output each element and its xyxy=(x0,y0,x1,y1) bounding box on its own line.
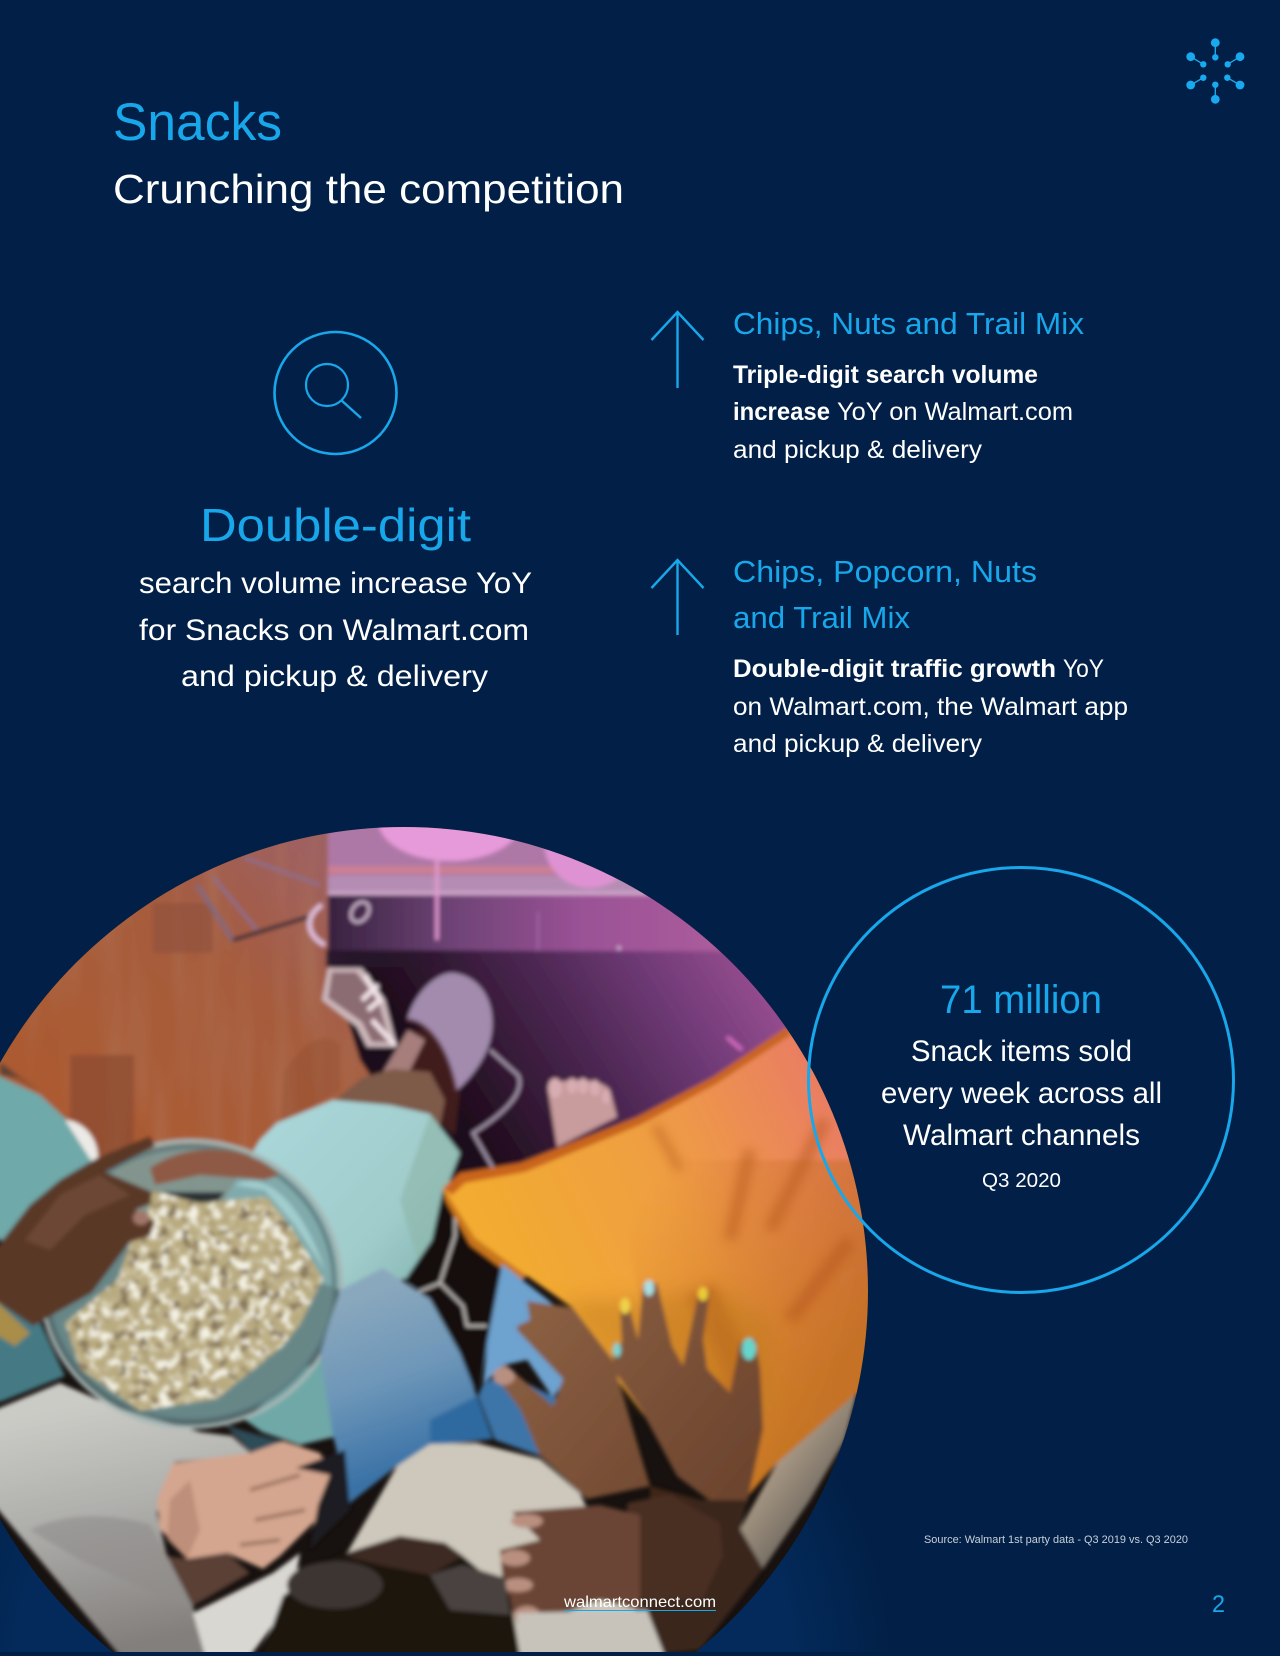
TV stand xyxy=(325,892,724,955)
icon: magnifier in circle xyxy=(274,332,396,454)
text block: double-digit traffic: Double-digit traffic growth xyxy=(733,655,1056,683)
wire xyxy=(473,1050,520,1168)
subtitle: Crunching the competition xyxy=(113,166,624,212)
tee left xyxy=(0,1383,252,1656)
shirt xyxy=(0,1072,95,1240)
painted nails xyxy=(613,1280,756,1360)
heading: Chips, Popcorn, Nuts and Trail Mix xyxy=(733,554,1037,635)
watch xyxy=(0,1300,30,1346)
link: walmartconnect.com: walmartconnect.com xyxy=(563,1594,716,1611)
icon: network logo xyxy=(1186,38,1244,104)
arrow: up xyxy=(652,560,704,635)
baby foot xyxy=(548,1080,617,1147)
text block: search volume description: for Snacks on Walmart.com xyxy=(139,614,529,647)
knee xyxy=(333,1069,445,1125)
baby hand left xyxy=(157,1441,332,1569)
popcorn bowl xyxy=(41,1141,341,1427)
beige hair xyxy=(740,1393,857,1569)
text block: triple-digit: increase xyxy=(733,398,830,426)
source note: Source: Walmart 1st party data - Q3 2019 vs. Q3 2020 xyxy=(924,1534,1188,1546)
panel: chips, nuts and trail mix xyxy=(652,306,1085,464)
callout: 71 million ring xyxy=(808,868,1234,1292)
text block: triple-digit: Triple-digit search volume xyxy=(733,361,1038,389)
ring xyxy=(808,868,1234,1292)
panel: chips, popcorn, nuts and trail mix xyxy=(652,554,1128,758)
lower shorts xyxy=(245,1360,334,1445)
shorts xyxy=(200,1100,460,1290)
jeans xyxy=(320,1268,493,1503)
pillow xyxy=(443,1027,880,1505)
leg and slipper xyxy=(383,1030,460,1135)
text block: search volume description: and pickup & delivery xyxy=(181,660,488,693)
hair and glasses xyxy=(262,1536,520,1656)
dark floor xyxy=(331,948,791,1182)
text block: triple-digit xyxy=(733,361,1073,464)
popcorn xyxy=(65,1190,323,1411)
heading: Chips, Popcorn, Nuts and Trail Mix: and Trail Mix xyxy=(733,600,910,635)
text block: search volume description xyxy=(139,567,532,693)
tee centre xyxy=(347,1443,660,1656)
stat: 71 million: 71 million xyxy=(940,978,1102,1022)
text block: search volume description: search volume increase YoY xyxy=(139,567,532,600)
heading: Double-digit: Double-digit xyxy=(200,499,471,551)
baby arm right xyxy=(627,1494,723,1600)
text block: snack items: Snack items sold xyxy=(911,1035,1132,1068)
rug xyxy=(328,815,800,897)
text block: triple-digit: and pickup & delivery xyxy=(733,436,983,464)
remote xyxy=(296,1450,350,1549)
title: Snacks xyxy=(113,93,282,152)
photo: family sharing popcorn in a circle xyxy=(0,779,900,1656)
right hands xyxy=(493,1301,650,1499)
text block: double-digit traffic xyxy=(733,655,1128,758)
shoe xyxy=(322,968,397,1047)
heading: Chips, Nuts and Trail Mix: Chips, Nuts and Trail Mix xyxy=(733,306,1085,341)
text block: double-digit traffic: on Walmart.com, the Walmart app xyxy=(733,693,1128,721)
text block: snack items: every week across all xyxy=(881,1077,1162,1110)
text block: snack items: Walmart channels xyxy=(903,1119,1140,1152)
page number: 2 xyxy=(1212,1591,1225,1618)
text block: snack items xyxy=(881,1035,1162,1152)
text block: double-digit traffic: and pickup & delivery xyxy=(733,730,983,758)
hand left xyxy=(0,1136,155,1326)
sleeve xyxy=(193,1553,300,1656)
arrow: up xyxy=(652,312,704,388)
panel: double-digit search stat xyxy=(139,332,532,693)
text block: double-digit traffic: YoY xyxy=(1063,655,1104,683)
text block: triple-digit: YoY on Walmart.com xyxy=(837,398,1073,426)
heading: Chips, Popcorn, Nuts and Trail Mix: Chips, Popcorn, Nuts xyxy=(733,554,1037,589)
gap behind pillow with cables xyxy=(405,1190,503,1392)
floor xyxy=(0,833,372,1212)
date: Q3 2020: Q3 2020 xyxy=(982,1170,1061,1192)
